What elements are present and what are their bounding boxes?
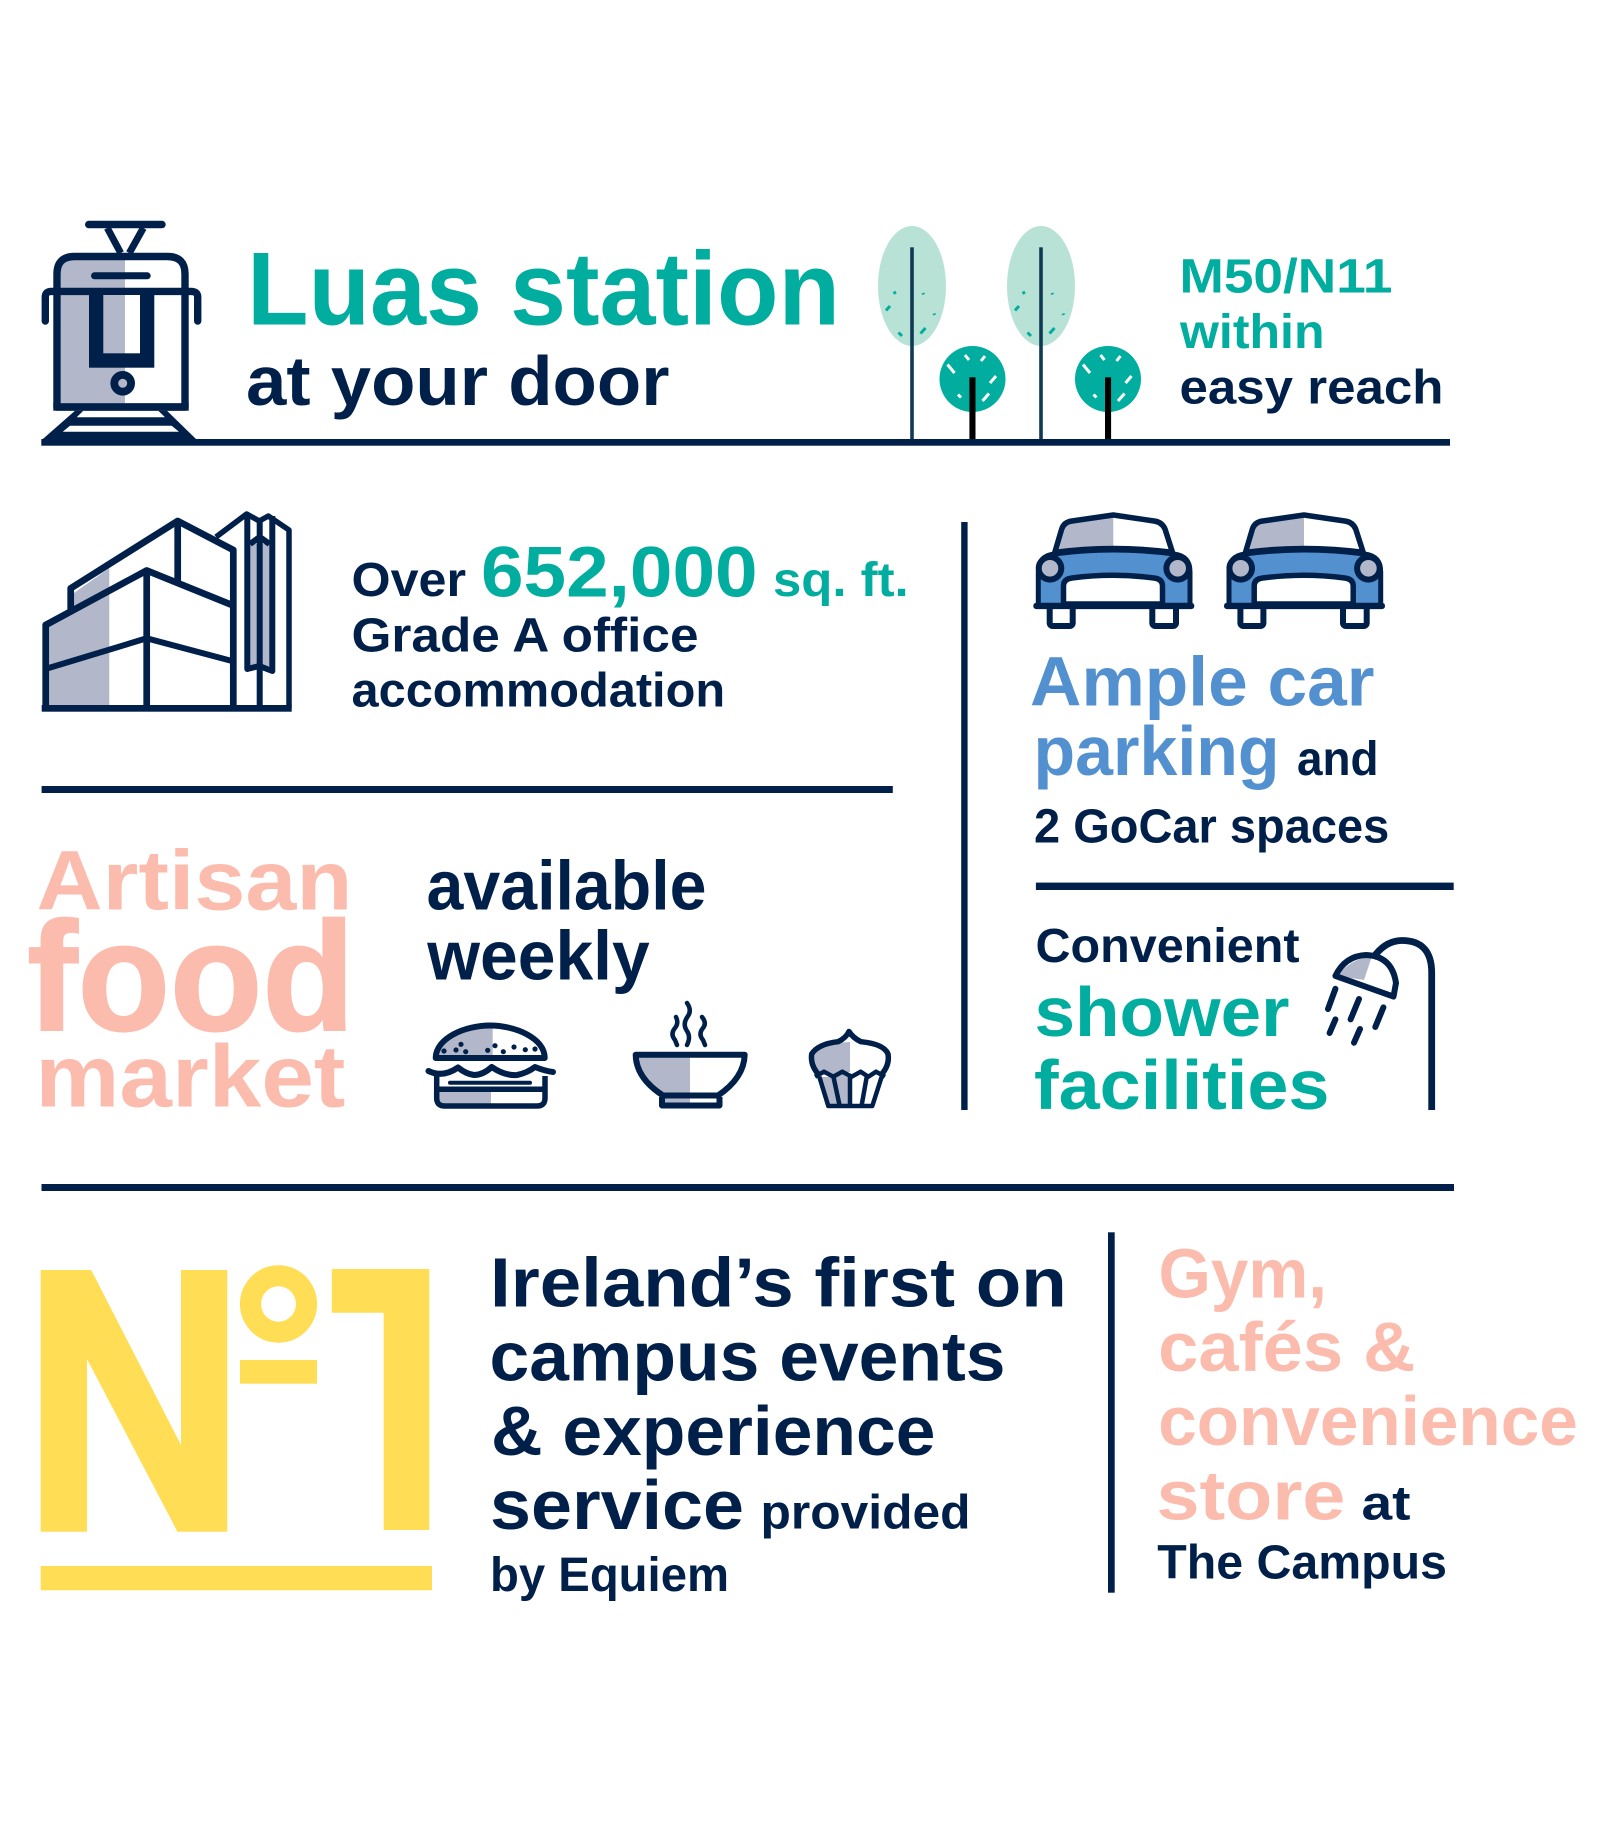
icon: shower [1328, 940, 1432, 1110]
panel: No 1 events [41, 1244, 1067, 1602]
icon: car 2 [1224, 515, 1385, 626]
text: 652,000 sq. ft. Grade A office accommodation: Grade A office [352, 609, 698, 662]
heading: Artisan food market: Artisan [36, 833, 352, 927]
text: 652,000 sq. ft. Grade A office accommodation [352, 534, 909, 718]
heading: Artisan food market: food [27, 890, 355, 1063]
panel: Luas station [42, 221, 1444, 440]
text: 652,000 sq. ft. Grade A office accommodation: 652,000 [481, 534, 758, 613]
text: Ireland's first on campus events: campus events [490, 1318, 1006, 1396]
icon: office building [42, 514, 292, 712]
text: available weekly: weekly [426, 916, 650, 994]
divider: vertical centre [961, 522, 968, 1110]
heading: Artisan food market: market [35, 1027, 345, 1126]
text: available weekly: available [426, 846, 706, 924]
panel: gym cafes convenience store: at [1362, 1477, 1411, 1530]
text: Ireland's first on campus events: provided [760, 1486, 970, 1539]
panel: gym cafes convenience store: The Campus [1157, 1536, 1447, 1589]
subheading: at your door: at your door [246, 342, 670, 420]
text: M50/N11 within easy reach: M50/N11 [1180, 250, 1392, 304]
text: 652,000 sq. ft. Grade A office accommodation: accommodation [352, 665, 725, 718]
text: Ample car parking and 2 GoCar spaces: 2 GoCar spaces [1034, 800, 1389, 853]
text: Ireland's first on campus events: & experience [491, 1392, 935, 1470]
panel: gym cafes convenience store: convenience [1158, 1382, 1578, 1460]
panel: artisan food market [27, 833, 888, 1126]
divider: lower vertical [1108, 1232, 1115, 1593]
text: 652,000 sq. ft. Grade A office accommodation: sq. ft. [773, 554, 909, 607]
icon: burger [428, 1026, 553, 1106]
text: available weekly [426, 846, 706, 994]
text: Ample car parking and 2 GoCar spaces: parking [1034, 712, 1280, 790]
text: M50/N11 within easy reach: easy reach [1180, 360, 1444, 414]
heading: Artisan food market [27, 833, 355, 1126]
panel: office accommodation [42, 514, 909, 718]
text: Ireland's first on campus events: service [490, 1466, 744, 1544]
icon: car 1 [1033, 515, 1194, 626]
text: Ample car parking and 2 GoCar spaces [1030, 643, 1389, 853]
trees [878, 226, 1141, 439]
panel: gym cafes convenience store [1156, 1234, 1578, 1589]
icon: cupcake [811, 1032, 888, 1106]
panel: gym cafes convenience store: cafés & [1158, 1308, 1415, 1386]
panel: car parking [1030, 515, 1389, 853]
text: Ample car parking and 2 GoCar spaces: Ample car [1030, 643, 1374, 721]
text: Convenient shower facilities: facilities [1034, 1046, 1330, 1124]
text: Ample car parking and 2 GoCar spaces: and [1297, 733, 1379, 786]
icon: No 1 mark [41, 1265, 432, 1590]
panel: shower facilities [1034, 920, 1432, 1124]
icon: tram [42, 221, 198, 440]
text: M50/N11 within easy reach [1179, 250, 1444, 414]
text: Ireland's first on campus events [490, 1244, 1067, 1602]
text: Convenient shower facilities: shower [1034, 973, 1290, 1051]
text: Ireland's first on campus events: Ireland’s first on [490, 1244, 1067, 1322]
panel: gym cafes convenience store: Gym, [1158, 1234, 1327, 1312]
text: Convenient shower facilities [1034, 920, 1330, 1124]
text: 652,000 sq. ft. Grade A office accommodation: Over [352, 554, 466, 607]
text: Convenient shower facilities: Convenient [1036, 920, 1300, 973]
heading: Luas station: Luas station [247, 232, 840, 348]
panel: gym cafes convenience store: store [1156, 1456, 1345, 1534]
text: Ireland's first on campus events: by Equiem [490, 1549, 729, 1602]
icon: soup bowl [636, 1003, 745, 1106]
text: M50/N11 within easy reach: within [1179, 305, 1324, 359]
